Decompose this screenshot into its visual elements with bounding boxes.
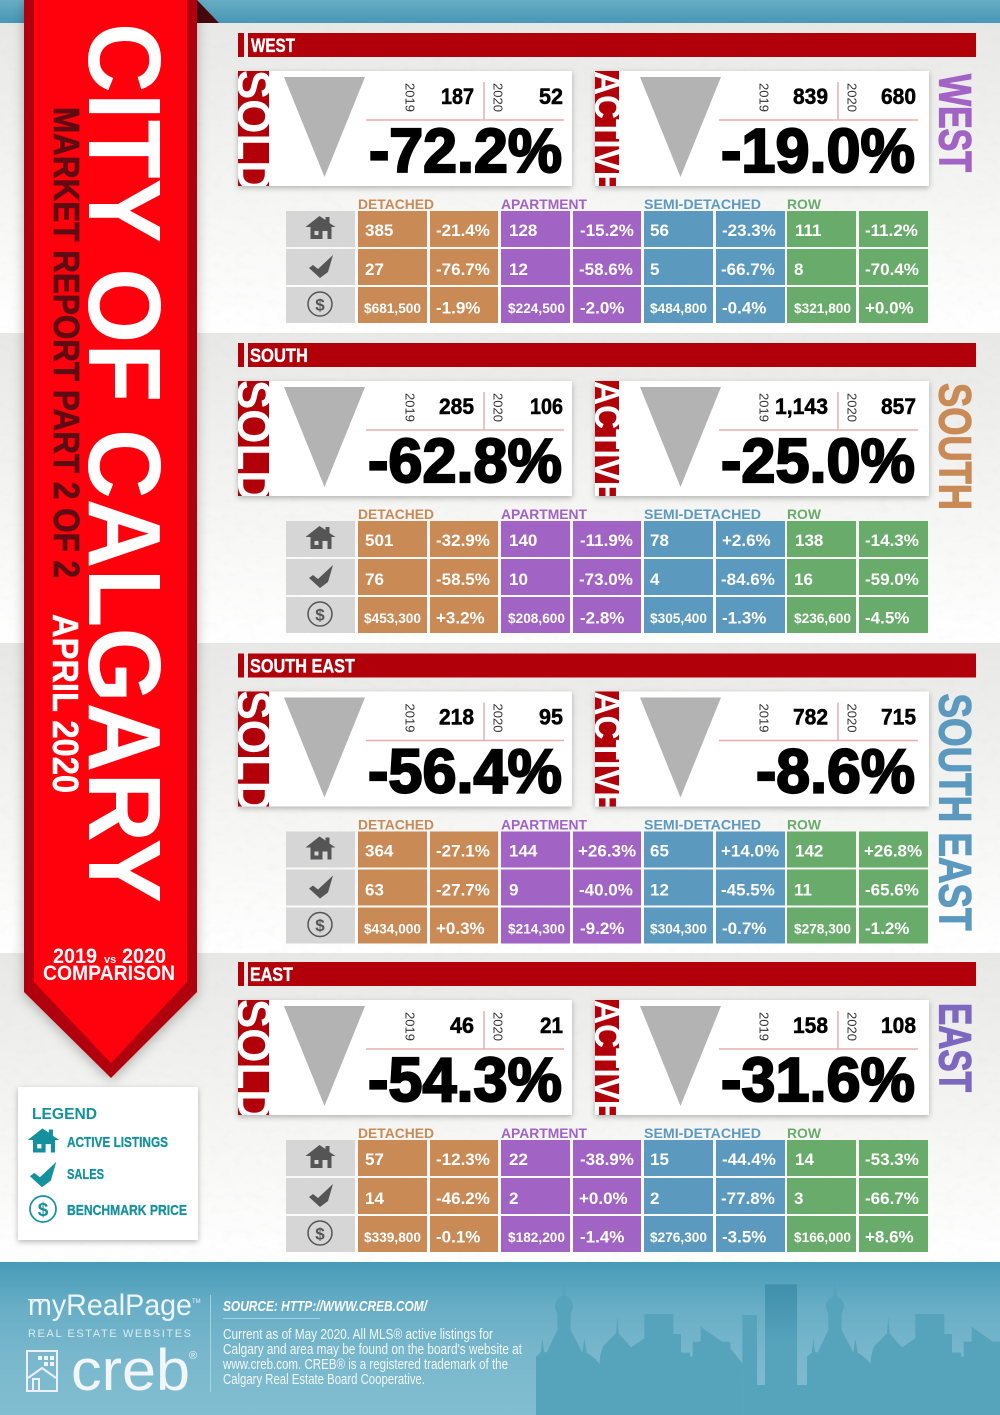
east table: -53.3% — [865, 1150, 919, 1169]
west sold card: 2019 — [402, 83, 418, 112]
east active card: -31.6% — [721, 1046, 915, 1115]
south table: 140 — [509, 531, 537, 550]
west table: -23.3% — [722, 221, 776, 240]
west table: $321,800 — [794, 300, 851, 316]
section: south east — [228, 654, 980, 944]
south table: -1.3% — [722, 608, 766, 628]
south table: $236,600 — [794, 610, 851, 626]
south table: 76 — [365, 570, 384, 589]
south east table: 364 — [365, 842, 394, 860]
south east side title: SOUTH EAST — [930, 694, 980, 930]
benchmark price label: BENCHMARK PRICE — [67, 1202, 187, 1219]
south table — [286, 506, 928, 633]
myRealPage logo: REAL ESTATE WEBSITES — [28, 1328, 191, 1340]
section: east — [228, 962, 980, 1252]
comparison label: COMPARISON — [43, 962, 175, 985]
south east table: +26.8% — [864, 842, 922, 860]
west table — [286, 196, 928, 323]
east table: DETACHED — [358, 1125, 434, 1141]
south east table: -1.2% — [865, 919, 909, 938]
myRealPage logo: TM — [192, 1299, 201, 1305]
section: west — [228, 33, 980, 323]
south east sold card — [228, 690, 572, 812]
south active card: 2019 — [756, 393, 772, 422]
comparison label: 2019 — [53, 945, 97, 968]
creb logo: creb — [71, 1338, 190, 1403]
comparison label: 2020 — [122, 945, 166, 968]
east header: EAST — [250, 965, 293, 986]
east table — [286, 1125, 928, 1252]
south east table: 65 — [650, 842, 669, 860]
footer note: Current as of May 2020. All MLS® active listings for — [223, 1326, 493, 1343]
ribbon fold — [197, 0, 219, 23]
south east table: 11 — [794, 880, 812, 900]
icon: dollar: $ — [38, 1200, 49, 1221]
east active card: 108 — [881, 1013, 916, 1038]
south east active card — [587, 692, 929, 814]
south east table: 63 — [365, 880, 384, 900]
south east active card: 715 — [881, 704, 916, 730]
south active card: ACTIVE — [587, 381, 628, 503]
west table: $681,500 — [364, 300, 421, 316]
south east table: APARTMENT — [501, 816, 587, 832]
south east table: 9 — [509, 880, 518, 900]
west table: 385 — [365, 221, 393, 240]
south table: +2.6% — [722, 531, 771, 550]
ribbon banner — [24, 0, 197, 1078]
south table: -73.0% — [579, 570, 633, 589]
west sold card: 2020 — [490, 83, 506, 112]
west table: -76.7% — [436, 260, 490, 279]
west table: 5 — [650, 260, 659, 279]
footer note — [222, 1318, 523, 1388]
footer note: Calgary and area may be found on the board's website at — [223, 1341, 523, 1358]
south table: $453,300 — [364, 610, 421, 626]
south east table: +14.0% — [721, 842, 779, 860]
west active card: ACTIVE — [587, 71, 628, 193]
icon: house — [28, 1128, 59, 1153]
west active card: 839 — [793, 84, 828, 109]
west active card: -19.0% — [721, 117, 915, 186]
west table: -0.4% — [722, 298, 766, 318]
south east sold card: -56.4% — [368, 738, 562, 806]
west table: $ — [315, 296, 325, 314]
south table: 501 — [365, 531, 393, 550]
east table: -66.7% — [865, 1189, 919, 1208]
east table: 2 — [650, 1189, 659, 1208]
west header — [238, 33, 976, 57]
west table: 128 — [509, 221, 537, 240]
south active card: -25.0% — [721, 427, 915, 496]
south table: 16 — [794, 570, 813, 589]
east table: $276,300 — [650, 1229, 707, 1245]
east sold card: 2019 — [402, 1012, 418, 1041]
east table: -44.4% — [722, 1150, 776, 1169]
creb logo: ® — [189, 1350, 197, 1362]
south table: 138 — [795, 531, 823, 550]
west table: -66.7% — [721, 260, 775, 279]
east table: -3.5% — [722, 1228, 766, 1246]
west sold card: SOLD — [228, 70, 280, 192]
south header: SOUTH — [250, 346, 308, 367]
east table: -0.1% — [436, 1228, 480, 1246]
west table: 8 — [794, 260, 803, 279]
footer — [0, 1262, 1000, 1415]
east active card: 2019 — [756, 1012, 772, 1041]
west active card: 2020 — [844, 83, 860, 112]
east table: $166,000 — [794, 1229, 851, 1245]
east sold card: 2020 — [490, 1012, 506, 1041]
south sold card: 2020 — [490, 393, 506, 422]
east table: $ — [315, 1224, 325, 1244]
west table: -21.4% — [436, 221, 490, 240]
east table: -46.2% — [436, 1189, 490, 1208]
south table: DETACHED — [358, 506, 434, 522]
south east table: 142 — [795, 842, 823, 860]
south table: -32.9% — [436, 531, 490, 550]
west sold card: -72.2% — [369, 117, 562, 186]
south table: +3.2% — [436, 608, 485, 628]
east table: $339,800 — [364, 1229, 421, 1245]
ribbon date: APRIL 2020 — [45, 614, 86, 793]
south east table: -27.7% — [436, 880, 490, 900]
west table: ROW — [787, 196, 822, 212]
south east table: -65.6% — [865, 880, 919, 900]
west active card — [587, 71, 929, 193]
south east header — [238, 654, 976, 678]
west table: $224,500 — [508, 300, 565, 316]
west table: SEMI-DETACHED — [644, 196, 761, 212]
south table: APARTMENT — [501, 506, 587, 522]
east table: 14 — [795, 1150, 814, 1169]
south active card: 857 — [881, 394, 916, 419]
south east table: -0.7% — [722, 919, 766, 938]
south east table: ROW — [787, 816, 822, 832]
west side title: WEST — [930, 74, 980, 172]
east table: APARTMENT — [501, 1125, 587, 1141]
south east header: SOUTH EAST — [250, 656, 355, 678]
east sold card: -54.3% — [368, 1046, 562, 1115]
active listings label: ACTIVE LISTINGS — [67, 1134, 168, 1151]
south east table: DETACHED — [358, 816, 434, 832]
south east active card: 2019 — [756, 704, 772, 732]
south table: $305,400 — [650, 610, 707, 626]
south sold card: -62.8% — [368, 427, 562, 496]
east sold card: 21 — [540, 1013, 563, 1038]
ribbon title: CITY OF CALGARY — [67, 23, 182, 903]
west active card: 2019 — [756, 83, 772, 112]
south east sold card: 95 — [539, 704, 563, 730]
south active card — [587, 381, 929, 503]
comparison label — [43, 945, 175, 985]
footer note: www.creb.com. CREB® is a registered trademark of the — [222, 1356, 508, 1373]
east side title: EAST — [930, 1003, 980, 1092]
west table: APARTMENT — [501, 196, 587, 212]
west sold card — [228, 70, 572, 192]
south east active card: 2020 — [844, 704, 860, 732]
south sold card: 106 — [530, 394, 563, 419]
south east table: $434,000 — [364, 920, 421, 936]
west table: -11.2% — [865, 221, 918, 240]
west table: -1.9% — [436, 298, 480, 318]
west table: 111 — [795, 221, 822, 240]
south table: ROW — [787, 506, 822, 522]
east table: +8.6% — [865, 1228, 914, 1246]
south east table: 12 — [650, 880, 669, 900]
south table: SEMI-DETACHED — [644, 506, 761, 522]
south east sold card: 2020 — [490, 704, 506, 732]
east table: SEMI-DETACHED — [644, 1125, 761, 1141]
south east table: $ — [315, 916, 325, 935]
south east sold card: 218 — [439, 704, 474, 730]
south table: -14.3% — [865, 531, 919, 550]
south east table: +0.3% — [436, 919, 485, 938]
south table: -59.0% — [865, 570, 919, 589]
west table: -70.4% — [865, 260, 919, 279]
source heading: SOURCE: HTTP://WWW.CREB.COM/ — [223, 1298, 428, 1315]
east active card: ACTIVE — [587, 1000, 628, 1122]
south side title: SOUTH — [930, 383, 980, 510]
east header — [238, 962, 976, 986]
east table: 14 — [365, 1189, 384, 1208]
south table: -84.6% — [721, 570, 775, 589]
creb logo — [27, 1338, 197, 1403]
myRealPage logo: myRealPage — [28, 1289, 192, 1322]
east sold card: SOLD — [228, 999, 280, 1121]
south table: -58.5% — [436, 570, 490, 589]
south east table: 144 — [509, 842, 538, 860]
south east table: $304,300 — [650, 920, 707, 936]
west table: $484,800 — [650, 300, 707, 316]
section: south — [228, 343, 980, 633]
east table: ROW — [787, 1125, 822, 1141]
icon: check — [30, 1162, 56, 1187]
south east table — [286, 816, 928, 944]
west active card: 680 — [881, 84, 916, 109]
west table: -2.0% — [580, 298, 624, 318]
comparison label: vs — [104, 954, 116, 966]
west table: 27 — [365, 260, 384, 279]
south sold card: 2019 — [402, 393, 418, 422]
south east table: SEMI-DETACHED — [644, 816, 761, 832]
south table: -2.8% — [580, 608, 624, 628]
south table: -4.5% — [865, 608, 909, 628]
south east sold card: 2019 — [402, 704, 418, 732]
south sold card: 285 — [439, 394, 474, 419]
east table: -12.3% — [436, 1150, 490, 1169]
south east table: -40.0% — [579, 880, 633, 900]
east active card: 158 — [793, 1013, 828, 1038]
west header: WEST — [251, 36, 295, 57]
south table: 10 — [509, 570, 528, 589]
south table: 78 — [650, 531, 669, 550]
south active card: 2020 — [844, 393, 860, 422]
ribbon subtitle: MARKET REPORT PART 2 OF 2 — [46, 107, 87, 578]
west table: -58.6% — [579, 260, 633, 279]
south sold card — [228, 380, 572, 502]
east table: -1.4% — [580, 1228, 624, 1246]
skyline — [536, 1277, 1000, 1415]
west sold card: 187 — [441, 84, 474, 109]
south header — [238, 343, 976, 367]
west table: DETACHED — [358, 196, 434, 212]
south east table: $214,300 — [508, 920, 565, 936]
south table: $208,600 — [508, 610, 565, 626]
south east active card: 782 — [793, 704, 828, 730]
myRealPage logo — [28, 1289, 201, 1340]
east table: 57 — [365, 1150, 384, 1169]
south table: $ — [315, 606, 325, 624]
south table: 4 — [650, 570, 660, 589]
west table: -15.2% — [580, 221, 634, 240]
east table: 3 — [794, 1189, 803, 1208]
east sold card: 46 — [450, 1013, 474, 1038]
east table: -38.9% — [580, 1150, 634, 1169]
legend heading: LEGEND — [32, 1106, 97, 1123]
south east table: -45.5% — [721, 880, 775, 900]
footer note: Calgary Real Estate Board Cooperative. — [223, 1371, 425, 1388]
east table: $182,200 — [508, 1229, 565, 1245]
south table: -11.9% — [580, 531, 633, 550]
west table: 56 — [650, 221, 669, 240]
west table: 12 — [509, 260, 528, 279]
east table: +0.0% — [579, 1189, 628, 1208]
south east table: -27.1% — [436, 842, 490, 860]
east table: -77.8% — [721, 1189, 775, 1208]
south east table: $278,300 — [794, 920, 851, 936]
south east sold card: SOLD — [228, 690, 280, 812]
east active card — [587, 1000, 929, 1122]
east table: 15 — [650, 1150, 669, 1169]
east table: 2 — [509, 1189, 518, 1208]
east active card: 2020 — [844, 1012, 860, 1041]
footer divider — [210, 1295, 211, 1392]
south east table: +26.3% — [578, 842, 636, 860]
east table: 22 — [509, 1150, 528, 1169]
west table: +0.0% — [865, 298, 914, 318]
icon: dollar — [30, 1196, 56, 1222]
east sold card — [228, 999, 572, 1121]
west sold card: 52 — [539, 84, 563, 109]
top blue bar — [0, 0, 1000, 23]
south sold card: SOLD — [228, 380, 280, 502]
south active card: 1,143 — [775, 394, 828, 419]
legend — [18, 1087, 198, 1240]
south east active card: -8.6% — [756, 738, 915, 806]
south east active card: ACTIVE — [587, 692, 628, 814]
south east table: -9.2% — [580, 919, 624, 938]
sales label: SALES — [67, 1166, 104, 1183]
